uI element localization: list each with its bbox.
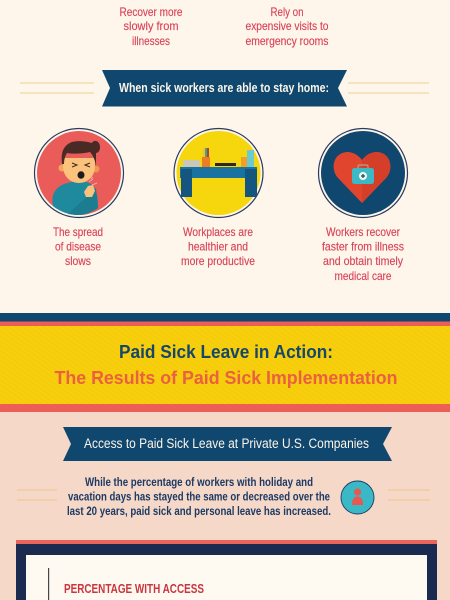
icon: person xyxy=(341,481,374,514)
text block: consequences of working sick xyxy=(120,5,329,48)
text block: leave trend: last 20 years, paid sick and personal leave has increased. xyxy=(67,504,331,518)
captions: benefits: of disease xyxy=(55,240,101,254)
text block: consequences of working sick: Rely on xyxy=(270,5,304,19)
captions: benefits xyxy=(53,225,404,283)
banner: access to paid sick leave: Access to Paid Sick Leave at Private U.S. Companies xyxy=(84,436,369,451)
text block: leave trend: While the percentage of workers with holiday and xyxy=(85,475,313,489)
text block: consequences of working sick: illnesses xyxy=(132,34,170,48)
captions: benefits: slows xyxy=(65,254,91,268)
captions: benefits: more productive xyxy=(181,254,255,268)
panel: percentage with access chart xyxy=(16,540,437,600)
lower section background xyxy=(0,412,450,600)
banner: when sick workers stay home xyxy=(102,70,347,106)
icon: office desk xyxy=(174,128,263,218)
section header band: Paid Sick Leave in Action: xyxy=(119,342,333,362)
text block: consequences of working sick: slowly from xyxy=(124,19,178,33)
captions: benefits: The spread xyxy=(53,225,103,239)
banner: when sick workers stay home: When sick workers are able to stay home: xyxy=(119,80,329,95)
section header band: The Results of Paid Sick Implementation xyxy=(54,368,398,388)
text block: leave trend: vacation days has stayed the same or decreased over the xyxy=(68,490,330,504)
text block: consequences of working sick: expensive visits to xyxy=(246,19,329,33)
icon: heart with medical kit xyxy=(318,128,408,218)
captions: benefits: and obtain timely xyxy=(323,254,403,268)
banner: access to paid sick leave xyxy=(63,427,392,461)
text block: consequences of working sick: Recover more xyxy=(120,5,183,19)
chart heading: PERCENTAGE WITH ACCESS xyxy=(64,581,204,596)
text block: consequences of working sick: emergency rooms xyxy=(246,34,328,48)
icon: coughing person xyxy=(34,128,124,218)
section header band xyxy=(0,313,450,412)
captions: benefits: medical care xyxy=(334,269,392,283)
text block: leave trend xyxy=(67,475,331,518)
captions: benefits: Workers recover xyxy=(326,225,400,239)
captions: benefits: Workplaces are xyxy=(183,225,253,239)
captions: benefits: healthier and xyxy=(188,240,248,254)
captions: benefits: faster from illness xyxy=(322,240,404,254)
